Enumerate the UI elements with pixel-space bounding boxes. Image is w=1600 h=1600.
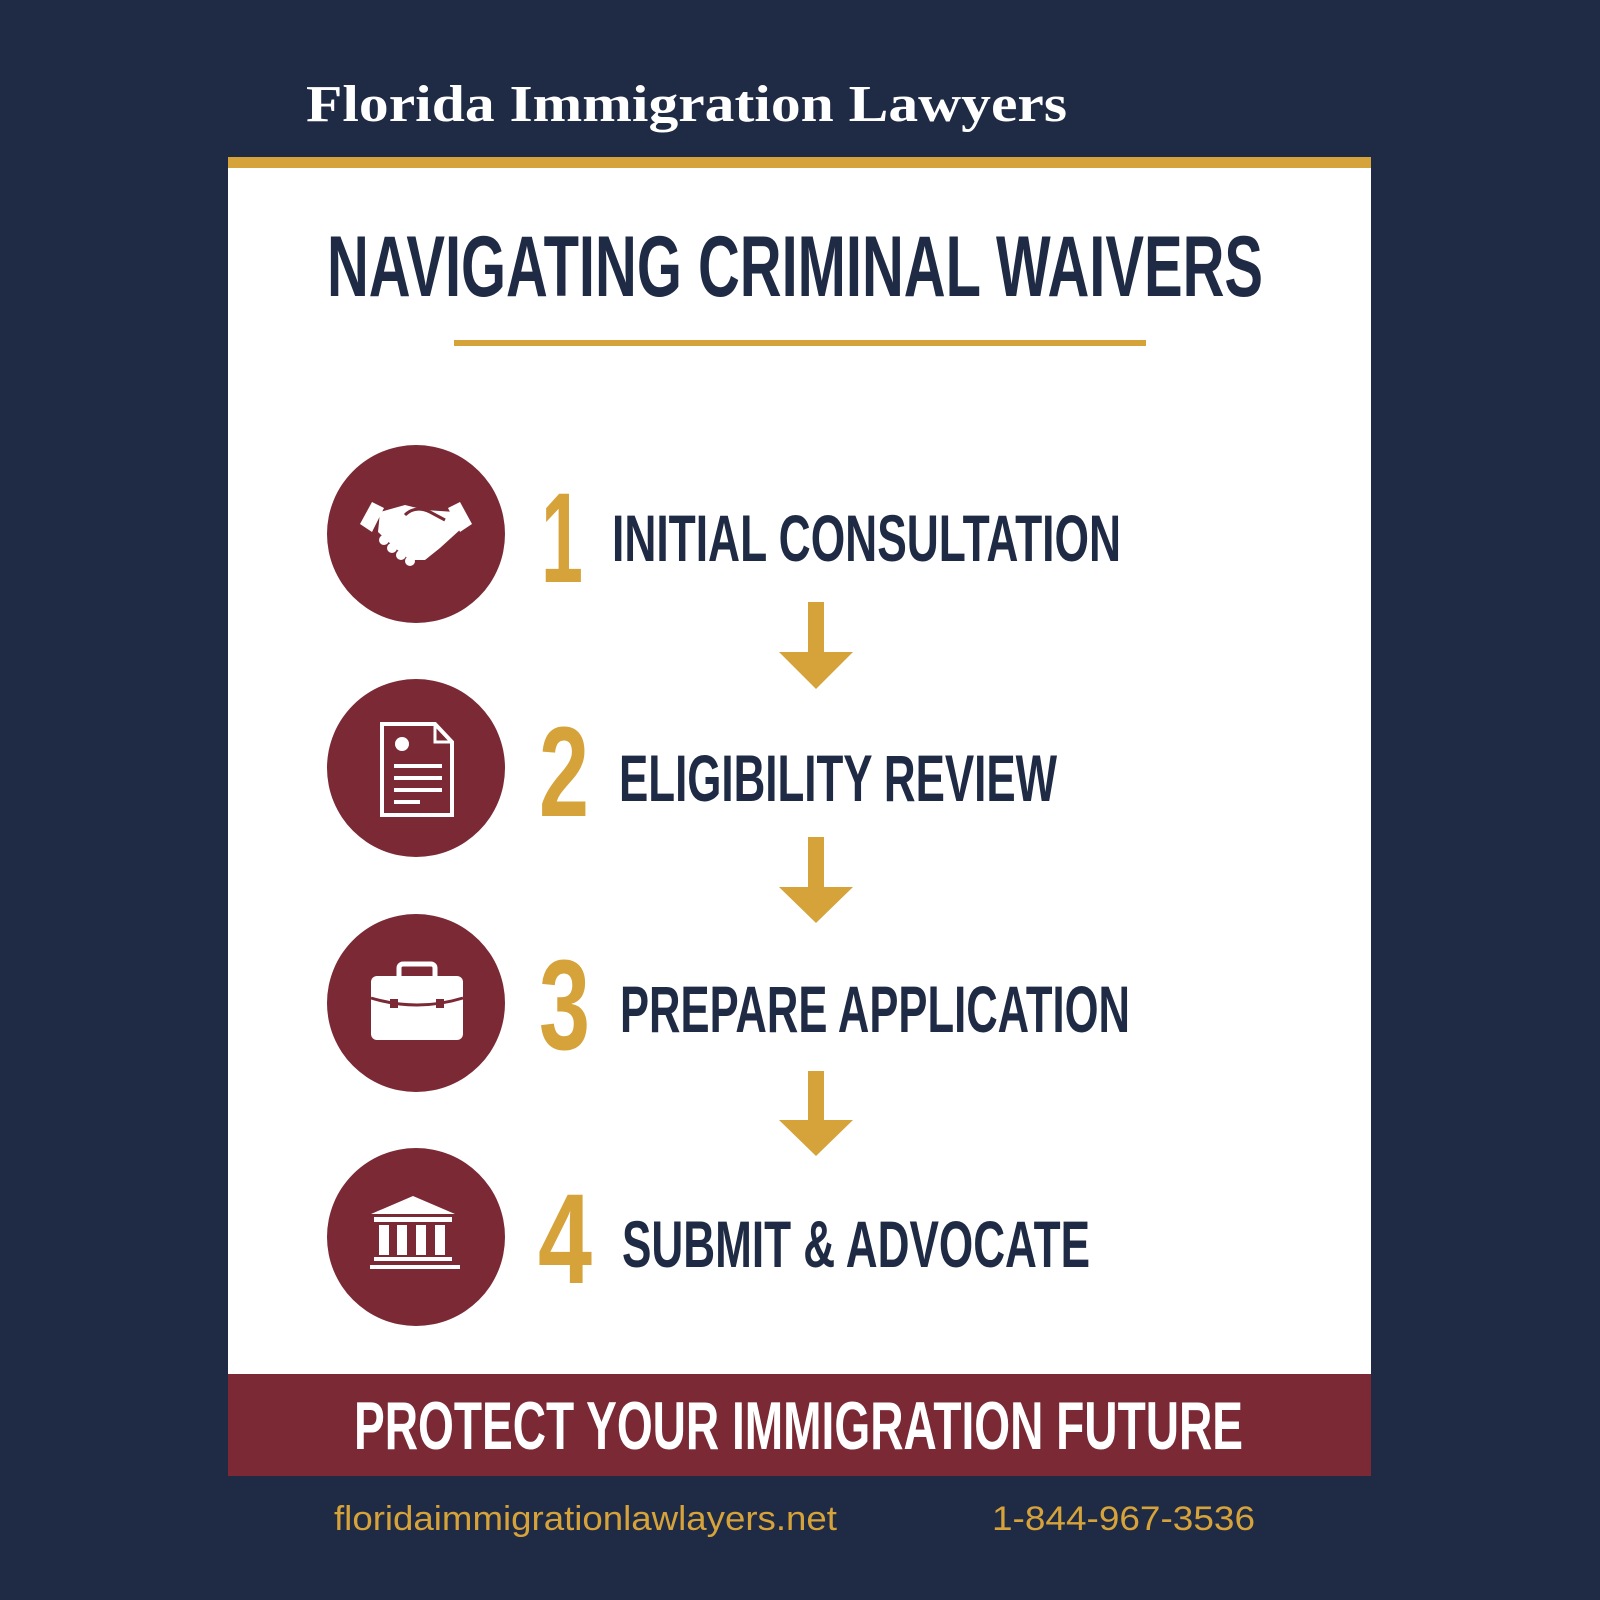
icon: document [327,679,505,857]
footer: phone: 1-844-967-3536 [992,1500,1255,1538]
number 1: 1 [541,467,583,610]
number 3: 3 [539,934,590,1077]
label: prepare application: PREPARE APPLICATION [620,972,1130,1046]
panel: main white card [228,157,1371,1374]
arrow 2 [779,837,853,923]
number 4: 4 [538,1168,592,1311]
arrow 3 [779,1071,853,1156]
icon: handshake [327,445,505,623]
footer: website: floridaimmigrationlawlayers.net [334,1500,838,1538]
step 1 [327,445,1121,623]
icon: briefcase [327,914,505,1092]
step 4 [327,1148,1090,1326]
label: initial consultation: INITIAL CONSULTATION [612,501,1121,575]
label: submit & advocate: SUBMIT & ADVOCATE [622,1207,1090,1281]
number 2: 2 [539,701,589,844]
banner: protect your immigration future [228,1374,1371,1476]
title underline [454,340,1146,346]
header: firm name: Florida Immigration Lawyers [306,76,1067,133]
step 2 [327,679,1057,857]
label: eligibility review: ELIGIBILITY REVIEW [619,741,1057,815]
step 3 [327,914,1130,1092]
arrow 1 [779,602,853,689]
icon: courthouse [327,1148,505,1326]
